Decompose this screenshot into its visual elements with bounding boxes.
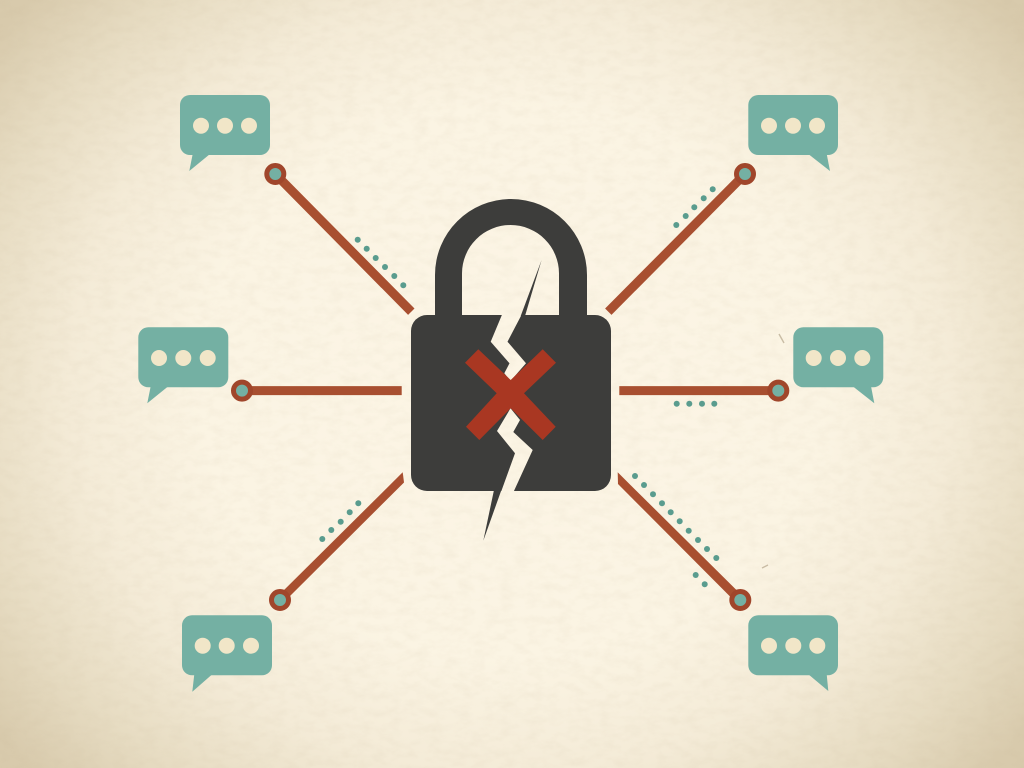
icon: cracked padlock: [411, 199, 611, 541]
connector: top right: [608, 166, 754, 312]
dotted trail: top left: [355, 237, 406, 288]
speech bubble: right: [793, 327, 883, 403]
dotted trail: top right: [673, 186, 716, 228]
connector: bottom left: [272, 472, 404, 608]
padlock shackle: [435, 199, 587, 316]
speech bubble: top left: [180, 95, 270, 171]
connector: bottom right: [618, 472, 749, 608]
dotted trail: right: [674, 401, 717, 407]
speech bubble: left: [138, 327, 228, 403]
speech bubble: bottom right: [748, 615, 838, 691]
speech bubble: bottom left: [182, 615, 272, 692]
crack sliver above body: [521, 260, 542, 316]
dotted trail: bottom right: [632, 473, 719, 587]
padlock body with crack: [411, 315, 611, 491]
red X mark: [465, 349, 556, 440]
connector: left: [234, 382, 402, 399]
connector: top left: [267, 166, 411, 312]
crack spike below body: [483, 490, 501, 541]
connector: right: [619, 382, 787, 399]
speech bubble: top right: [748, 95, 838, 171]
dotted trail: bottom left: [319, 500, 361, 542]
